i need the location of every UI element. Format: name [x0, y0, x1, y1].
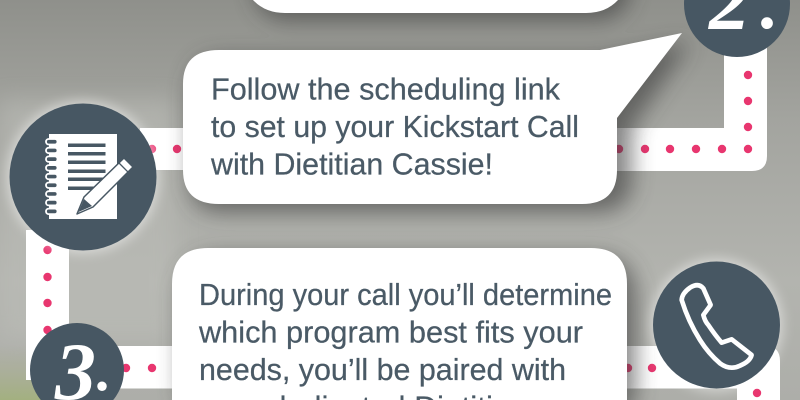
bubble shadows [180, 0, 690, 400]
call text: needs, you’ll be paired with [199, 352, 566, 387]
step number 3 [30, 323, 124, 400]
call text: During your call you’ll determine [199, 277, 612, 312]
scheduling text: Follow the scheduling link [211, 71, 560, 106]
top speech bubble [253, 0, 618, 13]
call text [198, 277, 612, 400]
notebook lines [68, 144, 106, 190]
speech bubble: scheduling [183, 33, 682, 204]
icon: notebook and pencil [10, 104, 156, 250]
scheduling text: with Dietitian Cassie! [210, 146, 493, 181]
scheduling text [210, 77, 578, 175]
notebook spiral [46, 139, 58, 214]
icon: telephone [653, 262, 780, 388]
call text: which program best fits your [198, 314, 583, 350]
step number 2 [684, 0, 790, 57]
pencil [77, 158, 133, 214]
speech bubble: call [172, 248, 627, 400]
notebook page [49, 134, 117, 219]
circle glows [7, 101, 782, 391]
path: pink dots [43, 71, 761, 397]
scheduling text: to set up your Kickstart Call [211, 109, 579, 144]
